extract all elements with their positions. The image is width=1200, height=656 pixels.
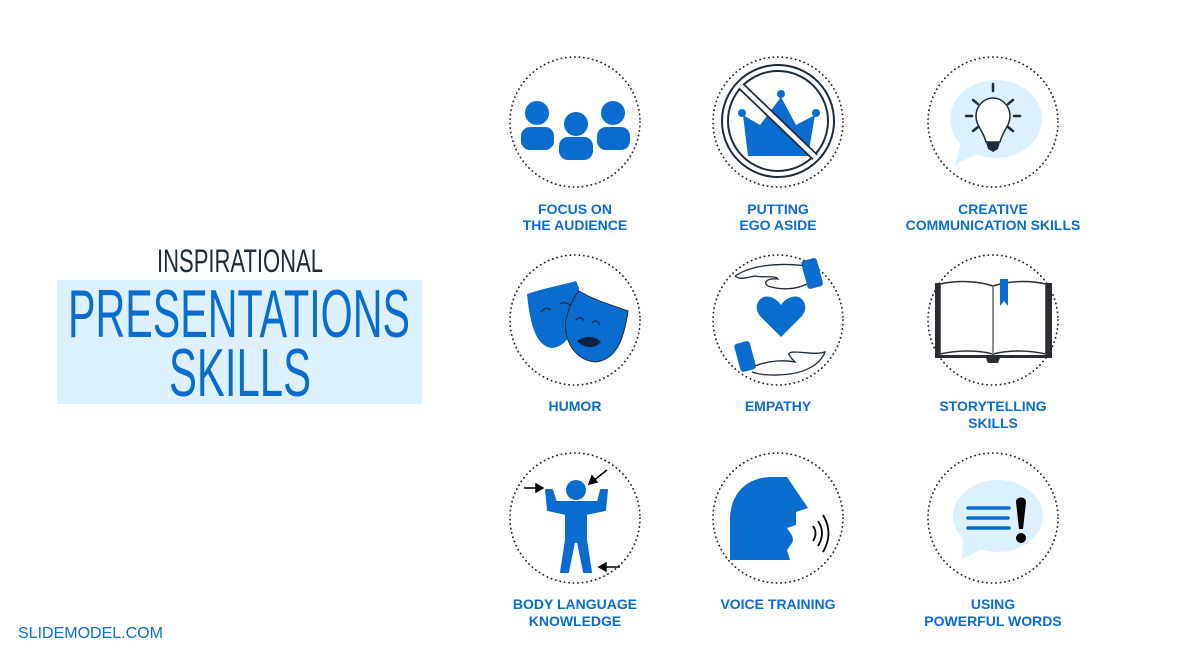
item: putting ego aside	[713, 57, 843, 233]
item: creative communication skills: COMMUNICATION SKILLS	[906, 217, 1080, 233]
item: storytelling skills: SKILLS	[968, 415, 1018, 431]
item: storytelling skills	[928, 255, 1058, 431]
item: focus on the audience: THE AUDIENCE	[523, 217, 627, 233]
subtitle: inspirational: INSPIRATIONAL	[157, 243, 323, 279]
item: humor	[510, 255, 640, 414]
item: creative communication skills: CREATIVE	[958, 201, 1028, 217]
title: presentations skills	[68, 276, 410, 411]
icon: open book	[935, 279, 1052, 363]
item: empathy	[713, 255, 843, 414]
icon: speech bubble with exclamation	[953, 480, 1043, 559]
item: putting ego aside: PUTTING	[747, 201, 809, 217]
title highlight box	[57, 280, 422, 404]
footer brand: SLIDEMODEL.COM	[18, 625, 163, 642]
item: storytelling skills: STORYTELLING	[939, 398, 1047, 414]
title block	[57, 243, 422, 411]
title: presentations skills: PRESENTATIONS	[68, 276, 410, 352]
icon: light bulb speech bubble	[950, 80, 1042, 165]
item: voice training	[713, 453, 843, 612]
item: using powerful words: USING	[971, 596, 1015, 612]
item: creative communication skills	[906, 57, 1080, 233]
icon: speaking head	[730, 477, 828, 560]
item: putting ego aside: EGO ASIDE	[739, 217, 817, 233]
item: humor: HUMOR	[549, 398, 601, 414]
icon: hands and heart	[734, 257, 825, 375]
item: body language knowledge: BODY LANGUAGE	[513, 596, 637, 612]
item: body language knowledge	[510, 453, 640, 629]
item: using powerful words	[924, 453, 1062, 629]
item: empathy: EMPATHY	[745, 398, 812, 414]
item: body language knowledge: KNOWLEDGE	[529, 613, 621, 629]
icon: theatre masks	[527, 281, 628, 362]
icon: crown with ban sign	[722, 65, 834, 177]
icon: person with arrows	[524, 470, 620, 572]
item: focus on the audience	[510, 57, 640, 233]
item: focus on the audience: FOCUS ON	[538, 201, 612, 217]
item: voice training: VOICE TRAINING	[720, 596, 836, 612]
icon: audience	[521, 101, 630, 160]
item: using powerful words: POWERFUL WORDS	[924, 613, 1062, 629]
title: presentations skills: SKILLS	[169, 335, 311, 411]
